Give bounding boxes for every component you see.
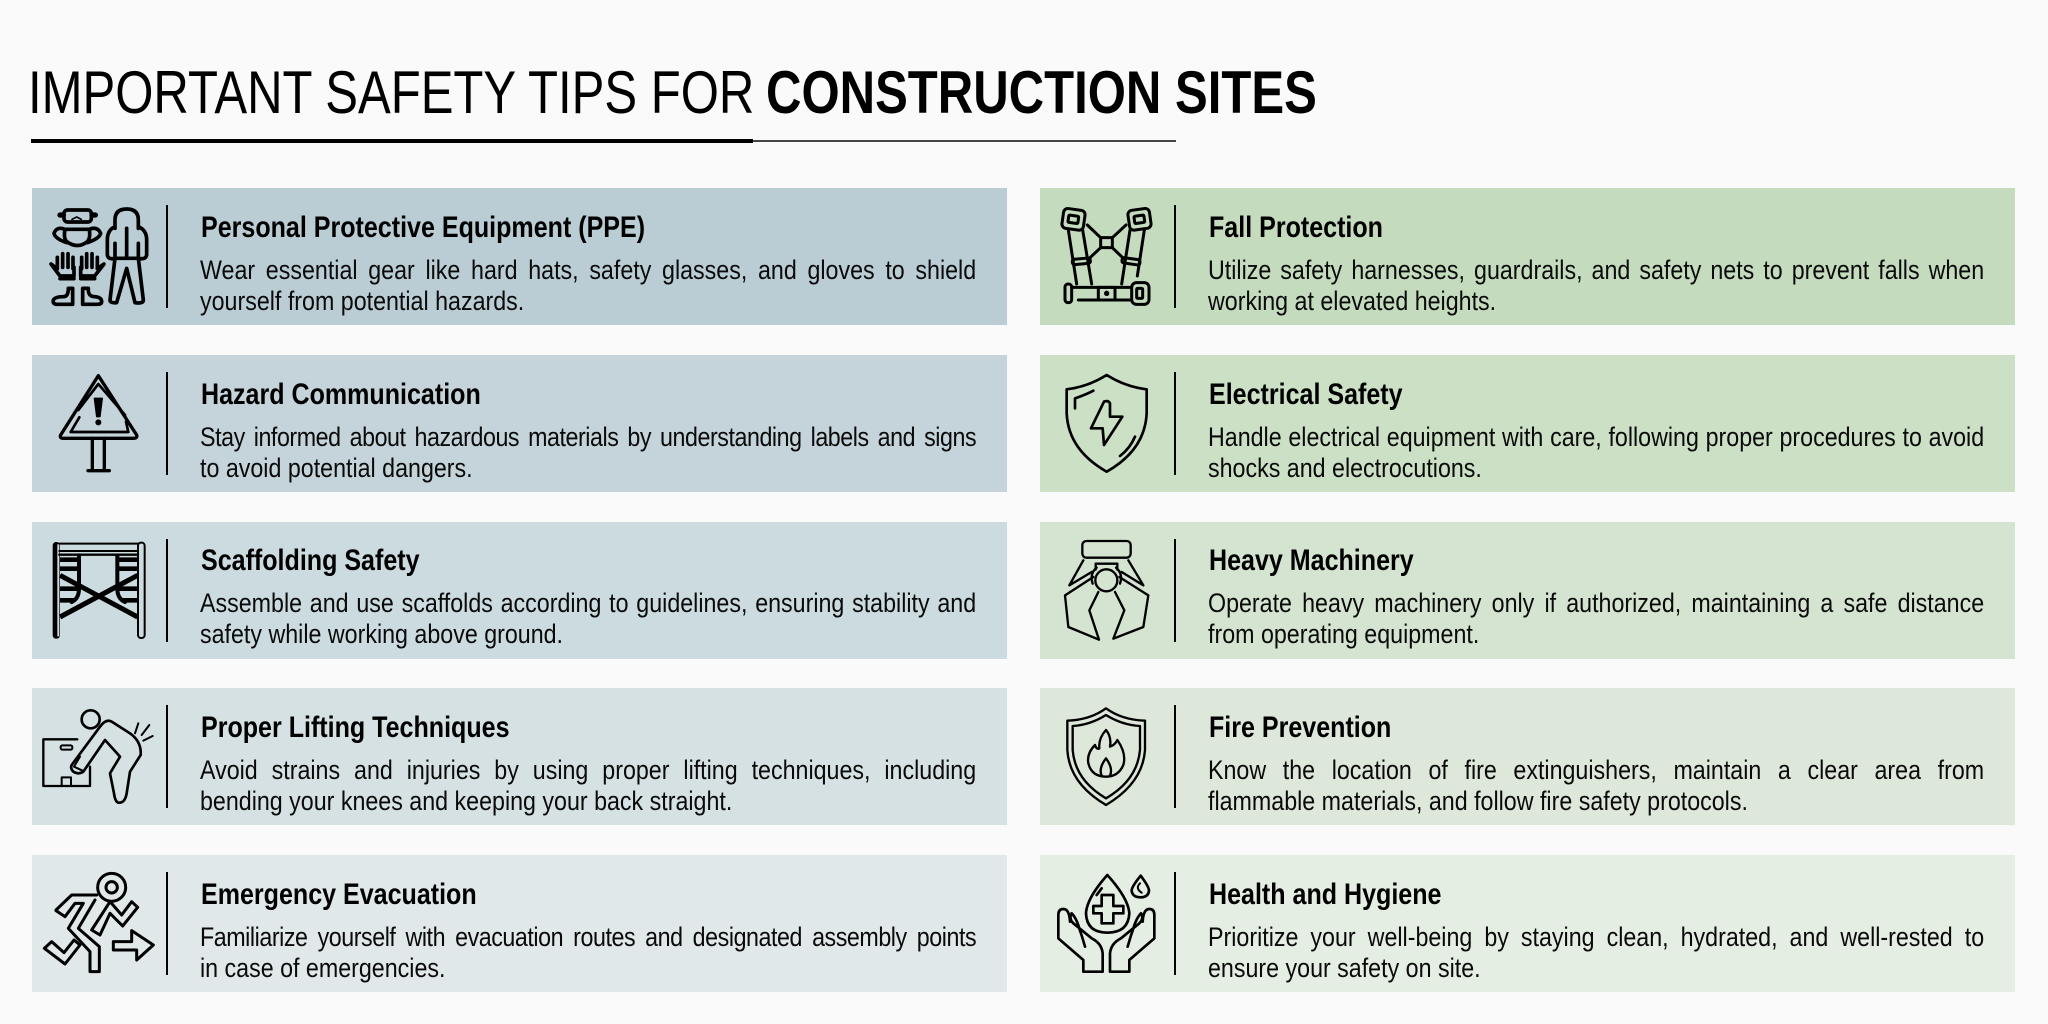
title: CONSTRUCTION SITES xyxy=(766,59,1317,126)
text block: shocks and electrocutions. xyxy=(1208,453,1482,483)
text block xyxy=(1208,755,1984,816)
panel: proper lifting techniques xyxy=(32,688,1007,825)
text block xyxy=(1208,922,1984,983)
text block: Stay informed about hazardous materials by understanding labels and signs xyxy=(200,422,976,452)
heading: Fire Prevention xyxy=(1208,710,1391,744)
text block: to avoid potential dangers. xyxy=(200,453,473,483)
text block: Familiarize yourself with evacuation routes and designated assembly points xyxy=(200,922,976,952)
panel: heavy machinery xyxy=(1040,522,2015,659)
heading: Electrical Safety xyxy=(1208,378,1402,410)
panel: emergency evacuation xyxy=(32,855,1007,992)
text block: yourself from potential hazards. xyxy=(200,286,524,316)
text block xyxy=(1208,255,1984,316)
panel: fall protection xyxy=(1040,188,2015,325)
icon: safety harness xyxy=(1060,207,1153,306)
text block: in case of emergencies. xyxy=(200,953,445,983)
heading: Heavy Machinery xyxy=(1208,544,1413,577)
text block: Assemble and use scaffolds according to guidelines, ensuring stability and xyxy=(200,588,976,618)
text block xyxy=(1208,422,1984,483)
text block: Handle electrical equipment with care, following proper procedures to avoid xyxy=(1208,422,1984,452)
panel: health and hygiene xyxy=(1040,855,2015,992)
heading: Fall Protection xyxy=(1208,210,1382,244)
title: IMPORTANT SAFETY TIPS FOR xyxy=(28,59,754,126)
text block: bending your knees and keeping your back straight. xyxy=(200,786,732,816)
heading: Personal Protective Equipment (PPE) xyxy=(200,210,645,244)
icon: shield with lightning bolt xyxy=(1065,374,1148,473)
text block: flammable materials, and follow fire safety protocols. xyxy=(1208,786,1748,816)
text block: Utilize safety harnesses, guardrails, and safety nets to prevent falls when xyxy=(1208,255,1984,285)
text block xyxy=(1208,588,1984,649)
heading: Proper Lifting Techniques xyxy=(200,710,509,744)
icon: hands holding drop with cross xyxy=(1057,874,1156,973)
panel: hazard communication xyxy=(32,355,1007,492)
icon: person lifting box xyxy=(42,709,154,804)
heading: Scaffolding Safety xyxy=(200,544,419,577)
text block xyxy=(200,422,976,483)
panel: fire prevention xyxy=(1040,688,2015,825)
text block: Prioritize your well-being by staying clean, hydrated, and well-rested to xyxy=(1208,922,1984,952)
text block: Avoid strains and injuries by using proper lifting techniques, including xyxy=(200,755,976,785)
text block: Wear essential gear like hard hats, safety glasses, and gloves to shield xyxy=(200,255,976,285)
title underline xyxy=(31,139,1176,143)
heading: Emergency Evacuation xyxy=(200,878,476,910)
text block: ensure your safety on site. xyxy=(1208,953,1481,983)
text block: Operate heavy machinery only if authorized, maintaining a safe distance xyxy=(1208,588,1984,618)
text block xyxy=(200,922,976,983)
icon: warning sign xyxy=(58,374,138,472)
heading: Hazard Communication xyxy=(200,378,480,410)
icon: person running to exit xyxy=(42,872,155,974)
text block: from operating equipment. xyxy=(1208,619,1479,649)
panel: scaffolding safety xyxy=(32,522,1007,659)
text block: working at elevated heights. xyxy=(1208,286,1496,316)
heading: Health and Hygiene xyxy=(1208,878,1441,910)
icon: protective gear xyxy=(49,207,148,306)
text block: Know the location of fire extinguishers, maintain a clear area from xyxy=(1208,755,1984,785)
title xyxy=(28,59,1317,126)
text block xyxy=(200,588,976,649)
text block xyxy=(200,255,976,316)
text block xyxy=(200,755,976,816)
icon: shield with flame xyxy=(1066,707,1146,806)
text block: safety while working above ground. xyxy=(200,619,563,649)
panel: electrical safety xyxy=(1040,355,2015,492)
panel: personal protective equipment xyxy=(32,188,1007,325)
icon: scaffold xyxy=(52,542,146,639)
icon: mechanical claw xyxy=(1064,540,1150,641)
